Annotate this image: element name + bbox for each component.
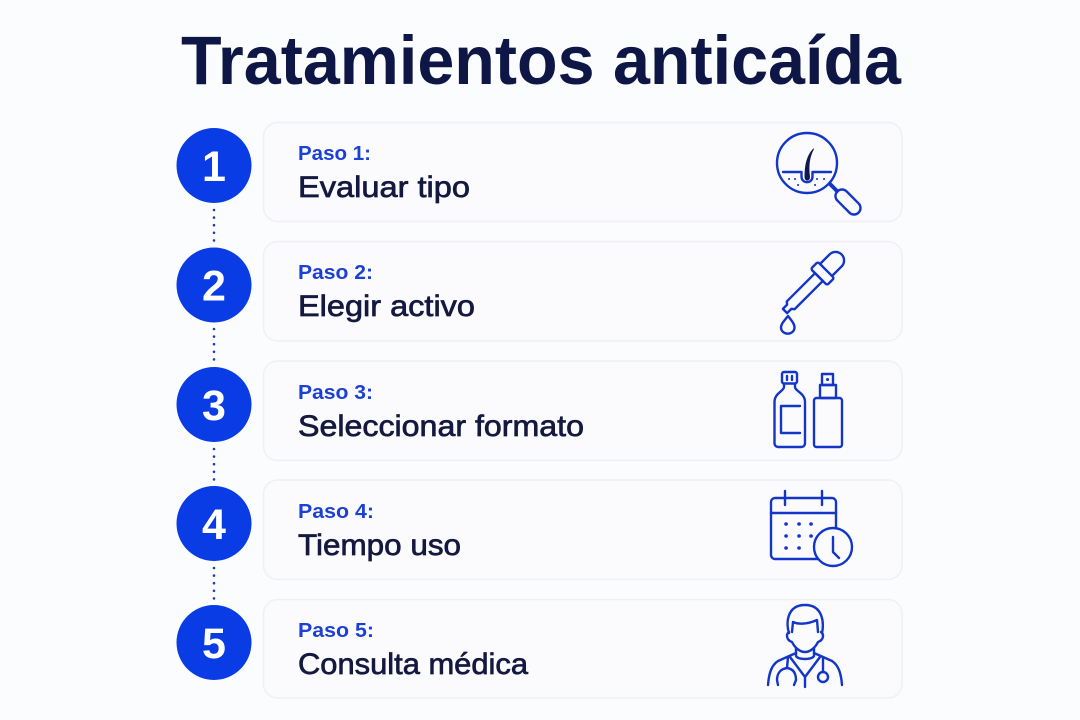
step 5 card <box>264 600 902 698</box>
step 5 number badge <box>176 605 252 680</box>
title: Tratamientos anticaída <box>181 22 902 99</box>
icon: dropper with drop <box>777 246 850 334</box>
step 3 card <box>264 361 902 460</box>
step 4 number badge: 4 <box>202 501 226 549</box>
icon: magnifier over hair follicle <box>777 133 863 217</box>
step 3 name: Seleccionar formato <box>298 410 584 443</box>
step 2 name: Elegir activo <box>298 290 475 323</box>
step 3 label: Paso 3: <box>298 382 373 404</box>
panel: step 2 <box>176 242 902 341</box>
icon: bottle and spray <box>774 372 842 447</box>
connector: step 4 to 5 <box>213 568 215 600</box>
step 5 name: Consulta médica <box>298 648 528 681</box>
step 4 number badge <box>176 486 252 561</box>
step 2 number badge: 2 <box>202 262 226 310</box>
step 5 number badge: 5 <box>202 620 226 668</box>
step 2 number badge <box>176 248 252 322</box>
panel: step 3 <box>176 361 902 460</box>
step 5 label: Paso 5: <box>298 620 374 642</box>
connector: step 3 to 4 <box>213 449 215 481</box>
panel: step 1 <box>176 122 902 222</box>
step 1 card <box>264 122 902 222</box>
step 3 number badge: 3 <box>202 382 226 430</box>
step 1 number badge <box>176 128 252 203</box>
step 2 card <box>264 242 902 341</box>
step 1 label: Paso 1: <box>298 143 371 165</box>
step 1 number badge: 1 <box>202 143 226 191</box>
panel: step 5 <box>176 600 902 698</box>
step 4 name: Tiempo uso <box>298 529 461 562</box>
step 3 number badge <box>176 367 252 442</box>
step 2 label: Paso 2: <box>298 262 373 284</box>
connector: step 1 to 2 <box>213 210 215 243</box>
panel: step 4 <box>176 480 902 580</box>
step 4 label: Paso 4: <box>298 501 374 523</box>
icon: calendar and clock <box>771 491 852 566</box>
step 1 name: Evaluar tipo <box>298 171 470 204</box>
step 4 card <box>264 480 902 580</box>
connector: step 2 to 3 <box>213 329 215 362</box>
icon: doctor with stethoscope <box>768 605 842 687</box>
